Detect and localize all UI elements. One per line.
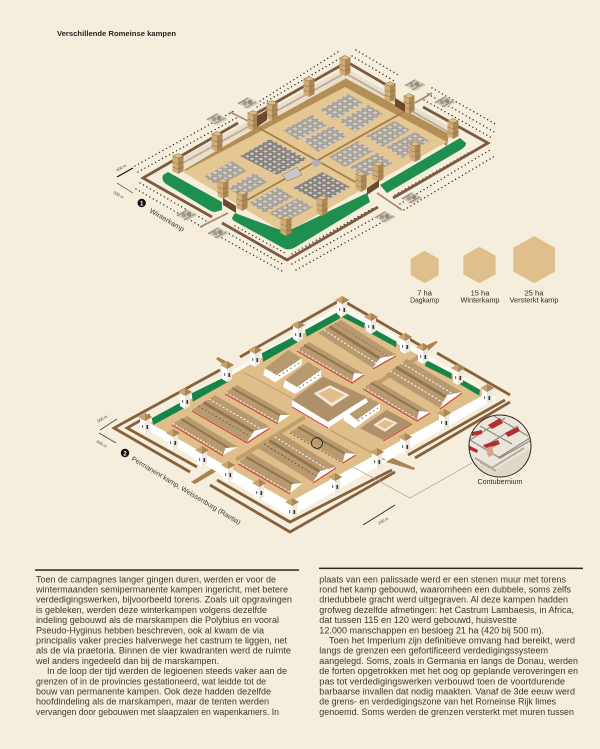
camp name: Permanent kamp, Weissenburg (Raetia) (130, 456, 242, 527)
text column right: driedubbele gracht werd uitgegraven. Al deze kampen hadden (319, 595, 568, 606)
text column right: de grens- en verdedigingszone van het Romeinse Rijk limes (319, 697, 556, 708)
building K (263, 350, 302, 382)
text column right: plaats van een palissade werd er een stenen muur met torens (319, 574, 566, 585)
gates (223, 98, 405, 213)
barrack H (385, 359, 462, 409)
camp 2: permanent camp illustration (114, 296, 510, 532)
dimension 500 m camp 2 (96, 413, 117, 430)
text column left: In de loop der tijd werden de legioenen steeds vaker aan de (47, 666, 287, 677)
barrack D (238, 453, 303, 494)
barrack G (363, 380, 430, 421)
stake dot rows around camp 1 (135, 50, 497, 271)
internal roads (236, 354, 423, 460)
outer roads (191, 341, 438, 484)
barrack J (318, 320, 396, 369)
text column right: 12.000 manschappen en besloeg 21 ha (420 bij 500 m). (319, 625, 544, 636)
back walls (178, 68, 345, 172)
dense tent blocks (240, 139, 350, 203)
hexagon 15 ha (460, 247, 500, 304)
text column right: langs de grenzen een gefortificeerd verdedigingssysteem (319, 646, 548, 657)
rule right column (319, 568, 583, 569)
dimension 200 m camp 2 (363, 505, 395, 526)
towers (172, 56, 458, 236)
dimension 600 m camp 2: 600 m (96, 439, 108, 449)
text column left: wintermaanden semipermanente kampen ingericht, met betere (35, 584, 288, 596)
text column right: de forten opgetrokken met het oog op geplande veroveringen en (319, 666, 578, 677)
text column left: wel anders ingedeeld dan bij de marskampen. (35, 656, 219, 667)
wall towers (138, 296, 494, 519)
text column right (319, 574, 578, 718)
dimension 400 m camp 1 (115, 162, 133, 177)
dimension 400 m camp 1: 400 m (115, 162, 128, 173)
text column left: principalis vaker precies halverwege het castrum te liggen, net (36, 636, 287, 646)
hexagon 7 ha (410, 251, 439, 304)
dimension 330 m camp 1: 330 m (113, 190, 125, 200)
hexagon 7 ha: Dagkamp (410, 296, 439, 304)
dimension 200 m camp 2: 200 m (377, 515, 390, 526)
camp name: Winterkamp (148, 208, 185, 234)
building L (283, 362, 321, 394)
white wall band (140, 393, 497, 517)
magnifier marker circle (312, 438, 322, 448)
hexagon 25 ha (510, 236, 558, 304)
text column left: vervangen door gebouwen met slaapzalen en wapenkamers. In (36, 707, 279, 718)
barrack F (290, 424, 356, 463)
camp 1: winter camp illustration (135, 50, 497, 271)
floor (150, 312, 487, 502)
text column right: grofweg dezelfde afmetingen: het Castrum Lambaesis, in Africa, (319, 605, 574, 616)
text column right: Toen het Imperium zijn definitieve omvang had bereikt, werd (329, 636, 575, 646)
hexagon 15 ha: Winterkamp (460, 296, 500, 304)
hexagon 7 ha: 7 ha (417, 288, 433, 298)
text column right: pas tot verdedigingswerken verbouwd toen de voortdurende (319, 676, 565, 687)
outside tent stacks (176, 79, 456, 239)
text column left: als de via praetoria. Binnen de vier kwadranten werd de ruimte (36, 646, 291, 657)
barrack I (297, 342, 364, 383)
back wall band (150, 304, 487, 425)
hexagon 25 ha: Versterkt kamp (510, 296, 558, 304)
text column left: grenzen of in de provincies gestationeerd, wat leidde tot de (36, 676, 266, 687)
camp 1 label (138, 199, 185, 234)
text column right: dat tussen 115 en 120 werd gebouwd, huisvestte (319, 615, 517, 626)
rear courtyard building (360, 410, 412, 441)
dimension 500 m camp 2: 500 m (96, 413, 109, 424)
central crossing tower (310, 159, 322, 167)
tent blocks (204, 94, 429, 222)
rule left column (35, 569, 299, 571)
text column left (35, 574, 292, 718)
text column left: verdedigingswerken, bijvoorbeeld torens. Zoals uit opgravingen (36, 595, 292, 606)
text column right: rond het kamp gebouwd, waaromheen een dubbele, soms zelfs (319, 584, 571, 596)
green ditches (162, 138, 466, 249)
headquarters courtyard (292, 377, 368, 428)
text column left: indeling gebouwd als de marskampen die Polybius en vooral (36, 615, 279, 626)
dimension 600 m camp 2 (96, 433, 116, 449)
barrack E (258, 433, 336, 483)
barrack C (225, 385, 290, 424)
text column left: Pseudo-Hyginus hebben beschreven, ook al kwam de via (36, 625, 265, 636)
hexagon 15 ha: 15 ha (471, 288, 490, 298)
number badge 2: 2 (123, 451, 127, 457)
text column left: hoofdindeling als de marskampen, maar de tenten werden (36, 697, 269, 708)
hexagon size comparison (410, 236, 558, 304)
floor (183, 87, 447, 233)
entrance roads (200, 93, 432, 227)
ditch outline (143, 62, 488, 260)
text column left: Toen de campagnes langer gingen duren, werden er voor de (36, 574, 276, 585)
text column right: genoemd. Soms werden de grenzen versterkt met muren tussen (319, 707, 574, 718)
title: Verschillende Romeinse kampen (57, 29, 176, 38)
barrack A (172, 416, 238, 456)
number badge 1: 1 (140, 201, 144, 207)
barracks (172, 320, 462, 494)
camp 2 label (121, 449, 242, 527)
internal roads (242, 110, 407, 203)
hexagon 25 ha: 25 ha (525, 288, 544, 298)
green strips (152, 312, 480, 425)
dimension 330 m camp 1 (113, 183, 133, 200)
text column right: aangelegd. Soms, zoals in Germania en langs de Donau, werden (319, 656, 578, 667)
contubernium label: Contubernium (478, 477, 522, 486)
barrack B (192, 395, 270, 443)
leader line to contubernium (353, 463, 472, 498)
building M (343, 397, 380, 428)
text column left: bouw van permanente kampen. Ook deze hadden dezelfde (36, 686, 271, 698)
praetorium tent (282, 167, 302, 181)
ditches (114, 302, 510, 532)
text column right: barbaarse invallen dat nodig maakten. Vanaf de 3de eeuw werd (319, 686, 575, 698)
contubernium detail circle (468, 414, 532, 478)
text column left: is gebleken, werden deze winterkampen volgens dezelfde (36, 605, 267, 616)
small buildings (263, 350, 412, 441)
